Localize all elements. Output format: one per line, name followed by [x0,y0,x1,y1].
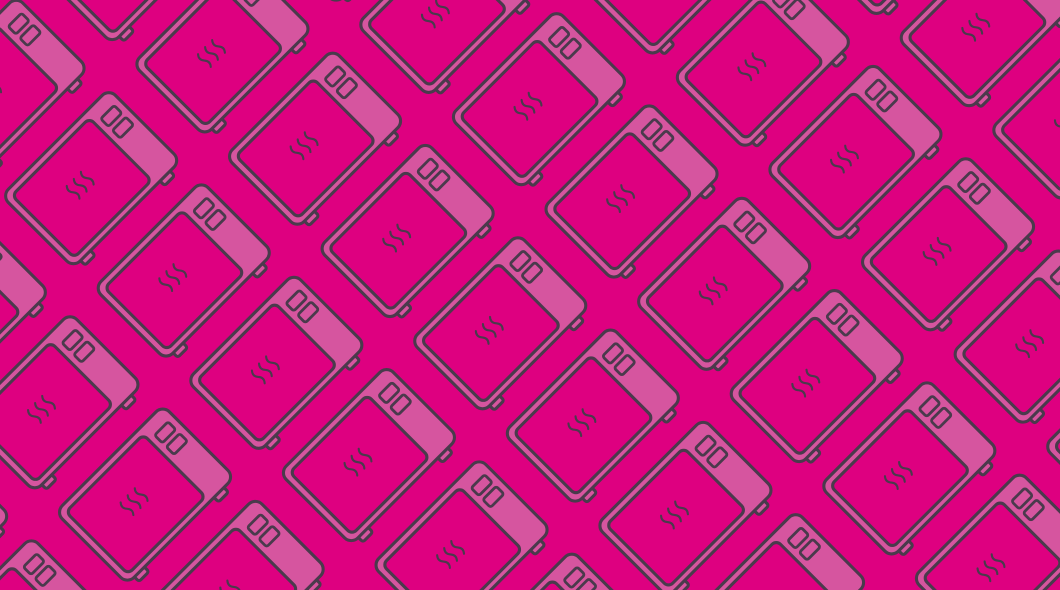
microwave icon [279,366,463,549]
microwave icon [727,287,911,470]
microwave icon [0,445,15,590]
microwave icon [148,497,332,590]
microwave icon [951,247,1060,431]
microwave icon [596,418,779,590]
microwave icon [94,181,278,365]
microwave icon [1044,339,1060,523]
microwave icon [133,0,316,140]
microwave icon [689,511,872,590]
microwave icon [581,0,764,61]
microwave icon [0,313,146,496]
microwave icon [820,379,1003,562]
microwave icon [226,49,409,233]
microwave icon [40,0,224,48]
microwave icon [411,234,594,417]
microwave icon [673,0,857,154]
microwave icon [0,221,54,404]
microwave icon [2,89,185,272]
microwave icon [805,0,988,22]
microwave icon [187,273,370,457]
microwave icon [449,10,633,193]
microwave icon [465,550,648,590]
microwave icon [318,142,502,325]
microwave icon [766,63,949,246]
microwave icon [372,458,556,590]
microwave icon [990,23,1060,207]
microwave icon [56,405,239,589]
microwave icon [897,0,1060,114]
microwave icon [0,537,108,590]
microwave icon [542,102,726,286]
microwave icon [912,471,1060,590]
microwave icon [264,0,448,9]
microwave icon [859,155,1042,338]
microwave icon [635,194,818,378]
microwave icon [0,0,93,180]
microwave icon [503,326,687,510]
microwave icon [357,0,540,101]
